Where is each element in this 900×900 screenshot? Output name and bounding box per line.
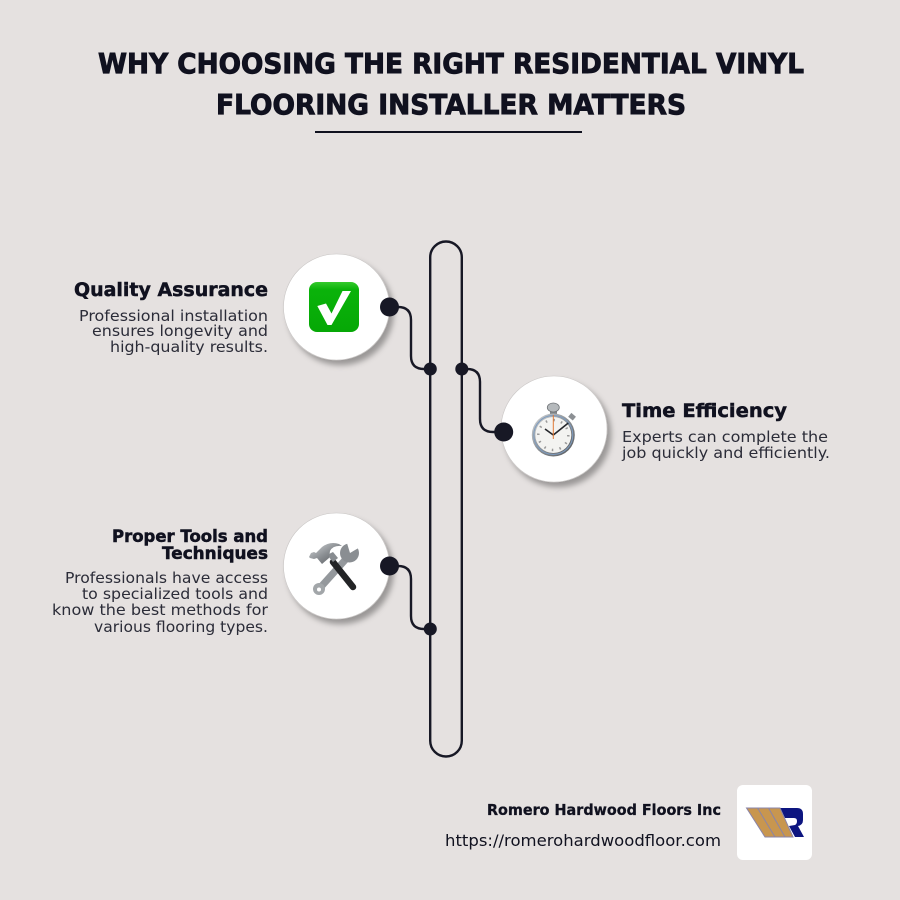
logo — [737, 785, 812, 860]
footer: company name and url: https://romerohardwoodfloor.com — [445, 831, 721, 850]
footer: company name and url: Romero Hardwood Floors Inc — [487, 801, 721, 819]
icon circle: check mark — [284, 254, 390, 360]
central track — [430, 242, 462, 756]
icon circle: stopwatch — [501, 376, 607, 482]
text: time efficiency description: Experts can complete the — [622, 428, 828, 446]
title: FLOORING INSTALLER MATTERS — [216, 89, 686, 121]
text: quality assurance description: ensures longevity and — [92, 322, 268, 340]
heading: time efficiency: Time Efficiency — [622, 400, 788, 422]
text: quality assurance description: Professional installation — [79, 307, 268, 325]
text: tools description: Professionals have access — [65, 569, 268, 587]
text: tools description: know the best methods for — [52, 601, 269, 619]
title: WHY CHOOSING THE RIGHT RESIDENTIAL VINYL — [98, 48, 804, 80]
panel: proper tools and techniques — [52, 513, 437, 636]
text: tools description: to specialized tools and — [82, 585, 268, 603]
text: time efficiency description: job quickly and efficiently. — [621, 444, 830, 462]
connector: time efficiency — [455, 362, 513, 442]
footer: company name and url — [445, 801, 721, 850]
text: quality assurance description — [79, 307, 268, 356]
connector: quality assurance — [380, 298, 437, 376]
text: tools description: various flooring types. — [94, 618, 268, 636]
heading: proper tools and techniques: Proper Tools and — [112, 527, 268, 546]
wrench — [313, 542, 361, 595]
connector: tools — [380, 556, 437, 636]
panel: quality assurance — [74, 254, 437, 376]
heading: proper tools and techniques: Techniques — [162, 544, 268, 563]
text: quality assurance description: high-quality results. — [110, 338, 268, 356]
title — [98, 48, 804, 121]
icon circle: hammer and wrench — [284, 513, 390, 619]
heading: quality assurance: Quality Assurance — [74, 279, 268, 301]
heading: proper tools and techniques — [112, 527, 268, 563]
panel: time efficiency — [455, 362, 830, 482]
text: time efficiency description — [621, 428, 830, 462]
text: tools description — [52, 569, 269, 636]
hammer — [309, 543, 353, 587]
